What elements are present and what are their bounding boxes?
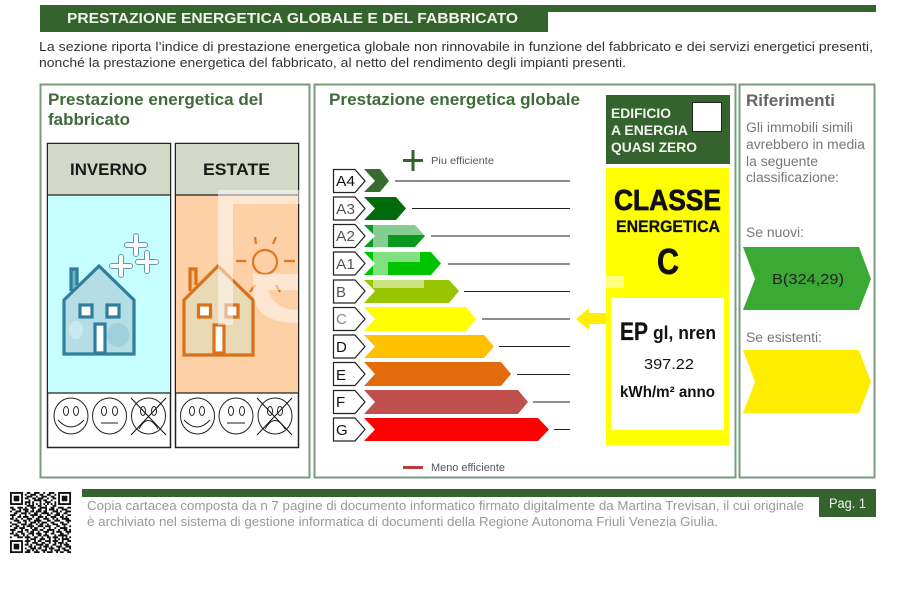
class letters: C [336,311,347,328]
class letters: F [336,394,345,411]
badge: edificio a energia quasi zero [606,95,730,164]
text: description: avrebbero in media [746,137,865,152]
text: description [746,120,865,185]
text: description: la seguente [746,154,818,169]
title band: PRESTAZIONE ENERGETICA GLOBALE E DEL FABBRICATO [67,11,518,27]
panel: riferimenti [740,84,874,478]
column: estate [176,144,298,448]
class letters: D [336,339,347,356]
icon: snowflakes [112,236,156,275]
class arrows [364,169,389,192]
label: piu efficiente: Piu efficiente [431,155,494,167]
column: estate: ESTATE [203,160,270,179]
panel: prestazione energetica globale [314,84,736,478]
arrow: green reference class [743,247,871,310]
heading: fabbricato: Prestazione energetica del [48,91,263,109]
intro text: nonché la prestazione energetica del fabbricato, al netto del rendimento degli impianti presenti. [39,55,626,70]
box: ep value: 397.22 [644,356,694,373]
leader lines [395,181,570,430]
text: description: Gli immobili simili [746,120,853,135]
page number: Pag. 1 [829,496,866,511]
class letters [336,173,355,439]
arrow: current class pointer [576,308,606,330]
box: ep value: kWh/m² anno [620,384,715,401]
column: inverno [48,144,170,448]
text: description: classificazione: [746,170,839,185]
watermark [218,190,624,325]
box: ep value: gl, nren [653,323,716,343]
heading: globale: Prestazione energetica globale [329,91,580,109]
page number [819,489,876,517]
class letters: G [336,422,348,439]
box: classe energetica: C [657,241,679,282]
column: inverno: INVERNO [70,160,147,179]
class letters: A3 [336,201,355,218]
icon: sun [236,237,295,292]
box: classe energetica: CLASSE [614,185,721,217]
footer text [87,499,804,529]
energy class scale [334,169,570,441]
icon: minus [403,466,423,469]
panel: prestazione energetica del fabbricato [40,84,310,478]
qr code [10,493,71,552]
icon: plus [403,150,423,171]
class letters: A1 [336,256,355,273]
label: meno efficiente: Meno efficiente [431,462,505,474]
icon: smileys inverno [54,398,166,435]
title band [40,5,876,32]
class letters: A2 [336,228,355,245]
footer text: Copia cartacea composta da n 7 pagine di documento informatico firmato digitalmente da Martina Trevisan, il cui originale [87,499,804,513]
box: classe energetica [606,168,729,445]
box: ep value: EP [620,318,648,346]
badge: edificio a energia quasi zero: A ENERGIA [611,123,688,138]
heading: riferimenti: Riferimenti [746,92,835,110]
arrow: yellow reference class [743,350,871,413]
intro text: La sezione riporta l’indice di prestazione energetica globale non rinnovabile in funzione del fabbricato e dei servizi energetici presenti, [39,39,873,54]
class labels [334,170,365,441]
class letters: E [336,367,346,384]
intro text [39,39,873,70]
icon: winter house [64,266,134,354]
arrow: green reference class: B(324,29) [772,271,844,288]
icon: summer house [184,266,253,355]
class letters: B [336,284,346,301]
label: se esistenti: Se esistenti: [746,330,822,345]
footer bar [82,489,876,517]
footer text: è archiviato nel sistema di gestione informatica di documenti della Regione Autonoma Friuli Venezia Giulia. [87,515,718,529]
label: se nuovi: Se nuovi: [746,225,804,240]
class letters: A4 [336,173,355,190]
badge: edificio a energia quasi zero: QUASI ZERO [611,140,697,155]
heading: fabbricato [48,91,263,129]
heading: fabbricato: fabbricato [48,111,130,129]
badge: edificio a energia quasi zero: EDIFICIO [611,106,671,121]
box: classe energetica: ENERGETICA [616,217,720,236]
box: ep value [611,298,724,430]
icon: smileys estate [180,398,292,435]
